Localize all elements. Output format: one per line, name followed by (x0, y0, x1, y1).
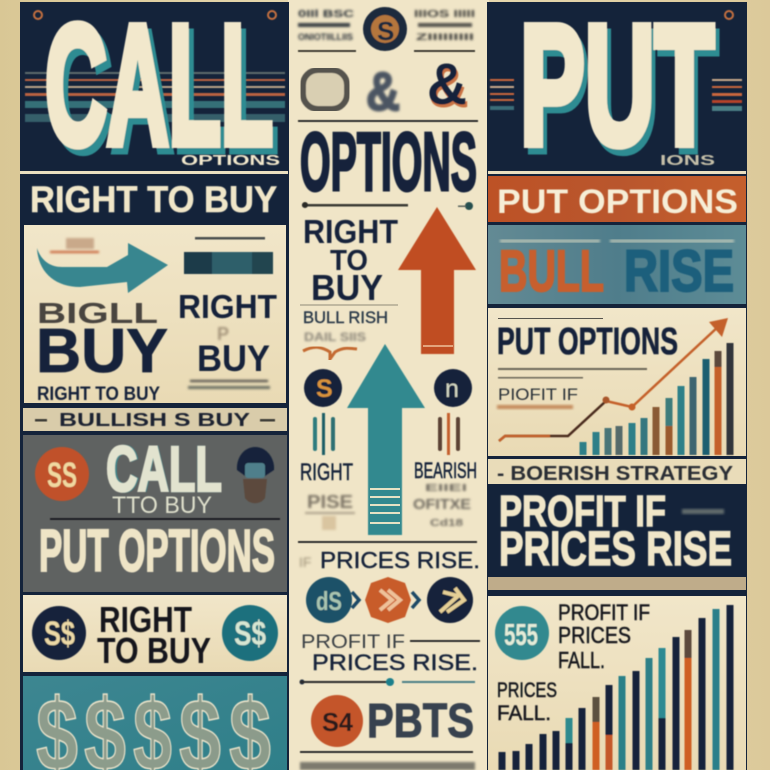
icon: right badge (434, 369, 472, 407)
text: profit if: PROFIT IF (301, 632, 405, 653)
icon: teal badge (495, 606, 549, 660)
faded text: bearish details: EIIEI (425, 483, 467, 494)
rule with dot (302, 202, 473, 210)
faded header text right: ZIIIIIIIII (416, 32, 474, 42)
bar swatch (184, 237, 273, 274)
icon: right ticks (438, 413, 460, 455)
text: right to buy stack: BUY (311, 267, 383, 308)
text: CALL (106, 433, 222, 505)
text: bearish: BEARISH (414, 458, 477, 483)
text: prices left: PRICES (497, 679, 557, 702)
icon: orange flourish (303, 347, 357, 359)
panel: centre column (290, 0, 487, 770)
banner: put options: PUT OPTIONS (497, 183, 738, 221)
icon: ampersand: & (427, 52, 467, 117)
panel: bottom chart (488, 596, 746, 770)
panel: dollar signs (23, 676, 287, 770)
text: PUT OPTIONS: PUT OPTIONS (39, 518, 275, 584)
faded text: rise: PISE (307, 492, 353, 512)
subheading: OPTIONS: OPTIONS (181, 153, 280, 169)
icon: right badge: n (445, 375, 459, 403)
icon: orange badge: S4 (322, 707, 354, 737)
subheading: ions: IONS (660, 153, 716, 169)
rule with dot (300, 678, 475, 686)
text: right to buy stack: TO (330, 245, 368, 277)
strip: bearish strategy: - BOERISH STRATEGY (497, 463, 734, 485)
panel: centre column: OPTIONS (300, 115, 477, 208)
faded text: bearish details (413, 483, 471, 529)
panel: call title (20, 0, 288, 187)
divider line (20, 171, 288, 174)
text: bullrish: BULL RISH (303, 308, 388, 327)
faded orange rule (497, 405, 573, 409)
text: BUY large: BUY (36, 317, 168, 386)
text: right to buy stack (303, 213, 398, 308)
text: profit if: PROFIT IF (558, 600, 650, 625)
faded text: bearish details: Cd18 (430, 518, 464, 529)
panel: call column (20, 0, 289, 770)
divider line (488, 171, 746, 174)
icon: left badge (304, 369, 342, 407)
text: blurred word: PBTS (367, 695, 474, 748)
line chart with arrow (499, 318, 728, 441)
icon: curved teal arrow (37, 243, 168, 293)
tan band (488, 577, 746, 590)
heading: right to buy band: RIGHT TO BUY (30, 179, 277, 220)
text: fall: FALL. (558, 647, 605, 673)
text: prices rise: PRICES RISE. (320, 547, 480, 573)
heading: CALL (45, 0, 278, 187)
faded header text left (298, 9, 354, 42)
icon: header medallion: S (377, 16, 394, 46)
panel: right to buy with badges (23, 595, 287, 672)
icon: teal up arrow (347, 344, 425, 535)
bar chart (580, 343, 734, 455)
text: CALL: CALL (108, 433, 221, 505)
text: CALL: CALL (106, 433, 222, 505)
rule (300, 751, 473, 753)
icon: teal dollar badge (222, 605, 278, 661)
icon: left badge: S (316, 375, 333, 403)
text: to buy: TTO BUY (112, 492, 212, 519)
panel: put column (487, 0, 747, 770)
faded glyph: P (217, 324, 229, 344)
icon: orange up arrow (398, 207, 476, 354)
text: BIGLL: BIGLL (37, 298, 158, 330)
icon: navy dollar badge: S$ (44, 615, 75, 653)
text: right: RIGHT (300, 459, 353, 486)
flow: three badges with chevrons: dS (316, 586, 342, 616)
text: fall left: FALL. (497, 702, 551, 725)
text: put options: PUT OPTIONS (497, 321, 678, 363)
faded label: DAIL SIIS (304, 330, 366, 344)
text: prices rise lower: PRICES RISE. (312, 650, 478, 675)
faded header text right: IIIOS IIIII (414, 9, 475, 20)
text: right to buy stack: RIGHT (303, 213, 398, 250)
rules (498, 368, 647, 378)
text: right: RIGHT (99, 599, 192, 640)
banner: bull rise (488, 225, 746, 304)
faded label above arrow (50, 238, 99, 253)
rule (298, 541, 477, 543)
panel: put title (487, 0, 746, 187)
text: profit if: PIOFIT IF (498, 385, 578, 404)
icon: ampersand: & (428, 55, 469, 120)
strip: bullish and buy (23, 408, 287, 431)
flow: three badges with chevrons (306, 577, 473, 623)
faded header text left: ONIOTIILLIIS (298, 32, 353, 42)
icon: orange dollar badge (35, 447, 89, 501)
icon: header medallion (363, 7, 407, 51)
panel: centre column background (288, 0, 489, 770)
header rules (298, 50, 475, 52)
faded rules (188, 380, 270, 389)
text: profit if: PROFIT IF (499, 487, 666, 536)
rule (298, 120, 478, 122)
dark rule (50, 518, 280, 520)
rule (300, 304, 398, 306)
text: RIGHT: RIGHT (178, 288, 277, 325)
icon: smudged ampersand: & (366, 62, 400, 122)
icon: orange badge (311, 695, 363, 747)
rule (410, 640, 480, 642)
heading: CALL: CALL (50, 0, 278, 187)
text: right to buy small: RIGHT TO BUY (37, 384, 160, 405)
icon: orange dollar badge: SS (47, 456, 77, 495)
panel: grey call and put (23, 433, 287, 592)
panel: right to buy card (24, 225, 286, 405)
faded header text right (414, 9, 475, 42)
icon: helmet (237, 447, 274, 503)
faded mark (682, 509, 724, 514)
arrow stripes (370, 488, 400, 524)
panel: put chart (488, 308, 746, 456)
strip: bullish and buy: BULLISH S BUY (59, 409, 251, 430)
icon: ring (303, 70, 347, 109)
icon: navy dollar badge (32, 606, 86, 660)
text: BUY: BUY (197, 338, 270, 379)
icon: left ticks (313, 413, 335, 455)
faded header text left: 0IIl BSC (298, 9, 354, 20)
faded text: rise (305, 492, 355, 530)
text: RISE: RISE (624, 239, 734, 304)
faded text: bearish details: OFITXE (413, 496, 471, 513)
text: prices: PRICES (558, 622, 631, 648)
icon: teal dollar badge: S$ (234, 615, 266, 653)
text: to buy: TO BUY (97, 630, 211, 671)
rule (498, 318, 603, 319)
icon: teal badge: 555 (504, 617, 538, 652)
bar chart (498, 605, 734, 770)
faded IF: IF (299, 554, 311, 570)
panel: profit if prices rise (488, 486, 746, 576)
hatch strip (300, 762, 475, 770)
text: BULL: BULL (499, 239, 604, 304)
